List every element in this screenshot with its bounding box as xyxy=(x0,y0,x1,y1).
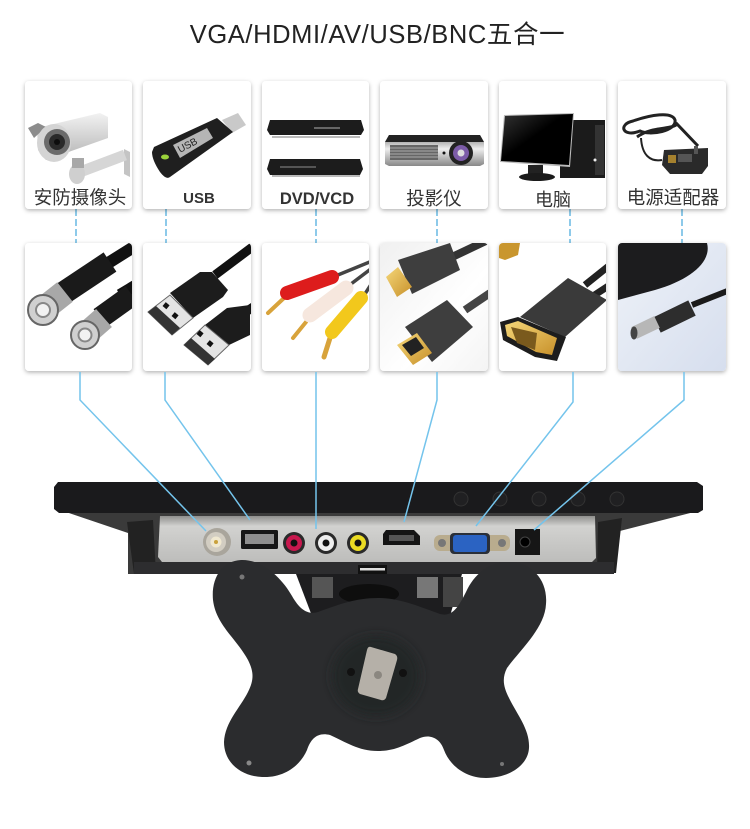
card: DC power cable xyxy=(618,243,730,371)
plate: screw holes xyxy=(240,574,244,580)
card: HDMI cable xyxy=(380,240,490,371)
label: DVD/VCD xyxy=(280,190,354,208)
icon: computer xyxy=(500,113,605,181)
plate: metal tab xyxy=(358,647,397,700)
card: computer xyxy=(499,81,606,210)
port: white RCA xyxy=(315,532,337,554)
connector lines: cables to ports xyxy=(80,372,684,531)
mounting plate xyxy=(213,560,546,778)
label: 安防摄像头 xyxy=(34,187,126,208)
title: VGA/HDMI/AV/USB/BNC五合一 xyxy=(190,21,565,49)
card: DVD/VCD xyxy=(262,81,369,209)
port: red RCA xyxy=(283,532,305,554)
monitor: silver port panel xyxy=(158,516,596,562)
icon: BNC connectors xyxy=(28,243,140,349)
monitor: buttons xyxy=(454,492,624,506)
port: BNC xyxy=(203,528,231,556)
icon: HDMI plugs xyxy=(386,240,490,365)
port: yellow RCA xyxy=(347,532,369,554)
monitor: side brackets xyxy=(127,518,622,574)
icon: USB plugs xyxy=(148,245,256,365)
monitor: front bezel xyxy=(54,482,703,513)
monitor: bottom strip xyxy=(134,562,614,574)
port: USB xyxy=(241,530,278,549)
card: projector xyxy=(380,81,488,209)
monitor: rear housing xyxy=(60,510,702,574)
card: power adapter xyxy=(618,81,726,209)
icon: power adapter xyxy=(624,115,708,174)
port: VGA xyxy=(434,533,510,554)
icon: camera xyxy=(28,113,130,184)
card: VGA cable xyxy=(499,243,610,371)
card: BNC cable xyxy=(25,243,140,371)
connector lines: upper dashed xyxy=(76,209,682,243)
icon: DC plug xyxy=(618,243,730,340)
stand xyxy=(296,565,463,616)
icon: VGA plug xyxy=(499,243,610,361)
card: AV cable xyxy=(262,243,372,371)
label: 电脑 xyxy=(535,190,571,210)
icon: DVD players xyxy=(267,120,364,177)
card: security camera xyxy=(25,81,132,209)
port: HDMI xyxy=(383,530,420,545)
plate: centre boss xyxy=(332,636,420,716)
card: USB cable xyxy=(143,243,256,371)
label: 电源适配器 xyxy=(627,187,719,208)
monitor xyxy=(54,482,703,574)
label: USB xyxy=(183,190,215,207)
icon: RCA plugs xyxy=(268,261,372,357)
port: DC power xyxy=(515,529,540,555)
card: USB xyxy=(143,81,251,209)
label: 投影仪 xyxy=(406,188,462,209)
icon: USB stick: USB xyxy=(176,136,200,156)
icon: projector xyxy=(385,135,484,166)
